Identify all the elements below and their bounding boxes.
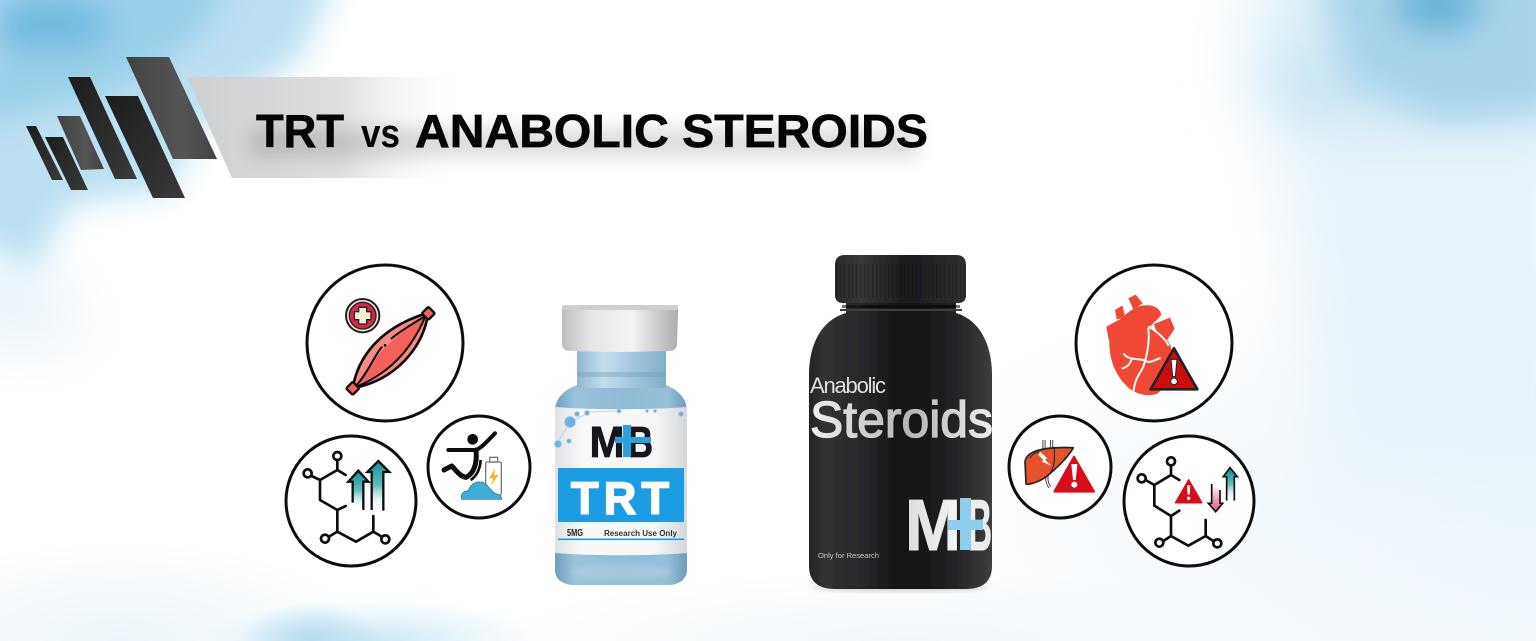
label molecule decoration [554,409,684,448]
right risk circle: hormone imbalance [1124,436,1254,566]
dose text: 5MG [567,527,583,539]
icon: molecule with rising arrows [304,452,389,543]
icon: heart with warning triangle [1106,295,1197,395]
vial base highlight [571,563,671,581]
bottle shadow [812,583,988,591]
bottle small text: Only for Research [818,551,879,560]
icon: jumping figure, battery and cloud [444,433,502,499]
title shadow [250,128,920,158]
icon: muscle with plus badge [346,299,435,395]
bottle text: Steroids: Steroids [810,391,993,448]
title text: vs [361,112,400,156]
MB logo: M [590,418,624,467]
bottle body [809,303,992,589]
left benefit circle: muscle [307,265,463,421]
TRT band [558,468,684,522]
product: TRT vial [554,305,687,585]
bottle logo: M [905,486,961,566]
TRT band text: TRT [571,473,669,524]
icon: molecule with warning and mixed arrows [1138,457,1237,547]
icon: liver with warning triangle [1025,440,1094,492]
title banner [26,57,928,198]
research text: Research Use Only [604,529,678,538]
right risk circle: liver [1009,416,1111,518]
product: Anabolic Steroids bottle [809,255,993,591]
banner ribbon [187,77,470,178]
background: upper blue clouds [0,0,1536,480]
right risk circle: heart [1076,265,1232,421]
title text: TRT [256,105,344,157]
vial label [554,407,687,555]
logo: stepped slanted bars [26,57,217,198]
left benefit circle: testosterone up [286,436,416,566]
MB logo: B [628,418,653,467]
vial glass [555,350,687,585]
vial cap [562,305,678,352]
text: B [968,486,992,566]
bottle cap [835,255,966,303]
MB logo [590,418,653,467]
bottle logo [905,486,992,566]
bottle text: Anabolic: Anabolic [810,373,886,398]
left benefit circle: energy [428,416,530,518]
title text: ANABOLIC STEROIDS [415,105,928,157]
